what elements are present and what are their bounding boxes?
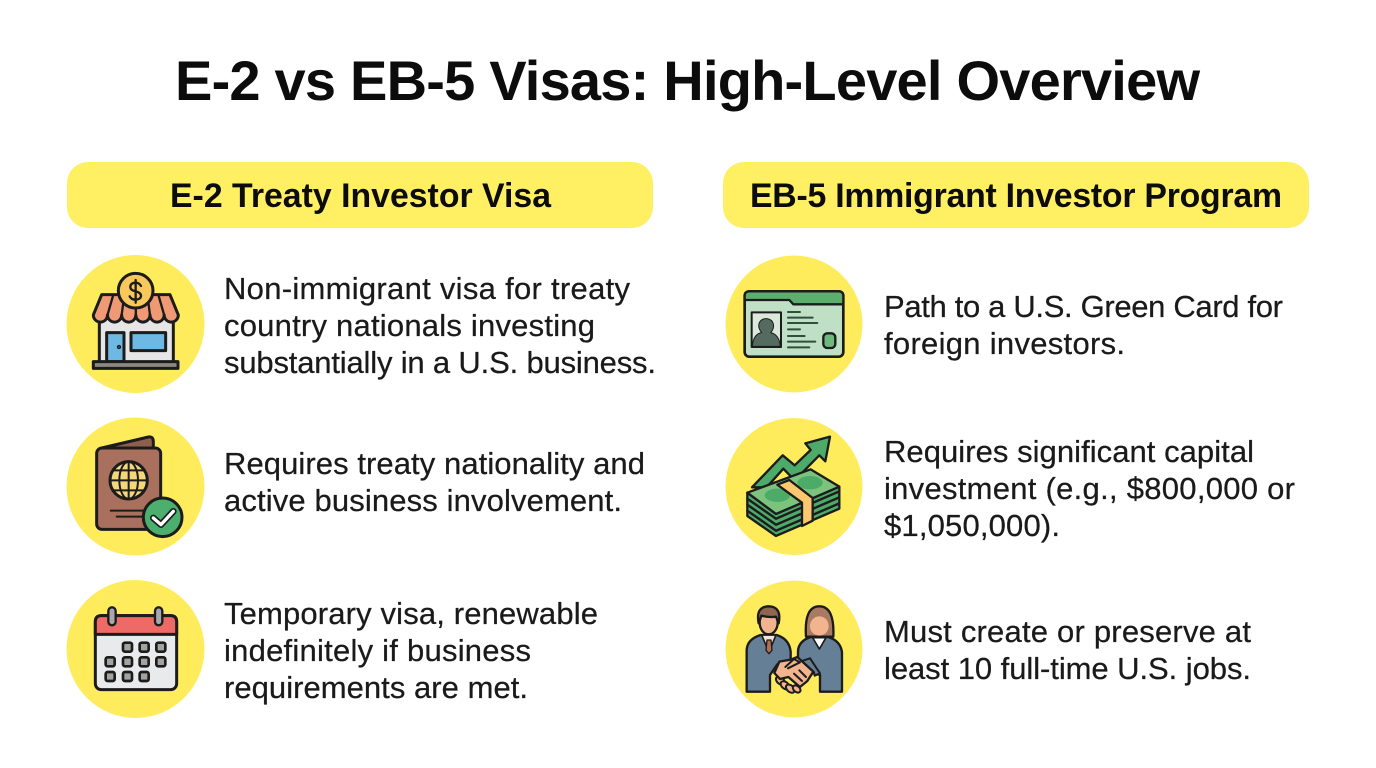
text: requires capital: investment (e.g., $800,000 or <box>884 471 1295 506</box>
text: non-immigrant: Non-immigrant visa for treaty <box>224 271 630 306</box>
panel: EB-5 Immigrant Investor Program <box>723 162 1309 718</box>
text: non-immigrant: substantially in a U.S. business. <box>224 345 656 380</box>
text: requires treaty nationality <box>224 446 645 518</box>
heading: E-2: E-2 Treaty Investor Visa <box>170 177 552 215</box>
text: requires treaty nationality: Requires treaty nationality and <box>224 446 645 481</box>
icon: business people handshake <box>726 580 862 718</box>
text: path to green card: foreign investors. <box>884 326 1125 361</box>
text: path to green card: Path to a U.S. Green Card for <box>884 289 1283 324</box>
heading: E-2 <box>67 162 653 228</box>
text: must create jobs: Must create or preserve at <box>884 614 1251 649</box>
text: temporary visa: indefinitely if business <box>224 633 531 668</box>
text: requires capital: Requires significant capital <box>884 434 1254 469</box>
icon: green card <box>726 256 862 392</box>
text: requires treaty nationality: active business involvement. <box>224 483 622 518</box>
icon: storefront with dollar coin <box>66 255 204 393</box>
text: requires capital <box>884 434 1295 543</box>
panel: E-2 Treaty Investor Visa <box>66 162 656 718</box>
text: temporary visa: Temporary visa, renewable <box>224 596 598 631</box>
text: temporary visa <box>224 596 598 705</box>
heading: EB-5: EB-5 Immigrant Investor Program <box>750 177 1282 215</box>
text: non-immigrant <box>224 271 656 380</box>
icon: passport with check <box>66 418 204 556</box>
text: non-immigrant: country nationals investing <box>224 308 595 343</box>
title: E-2 vs EB-5 Visas: High-Level Overview <box>175 49 1200 112</box>
icon: calendar <box>66 580 204 718</box>
text: path to green card <box>884 289 1283 361</box>
icon: money stack with rising arrow <box>726 418 862 555</box>
text: must create jobs: least 10 full-time U.S. jobs. <box>884 651 1251 686</box>
text: must create jobs <box>884 614 1251 686</box>
text: temporary visa: requirements are met. <box>224 670 528 705</box>
heading: EB-5 <box>723 162 1309 228</box>
text: requires capital: $1,050,000). <box>884 508 1060 543</box>
